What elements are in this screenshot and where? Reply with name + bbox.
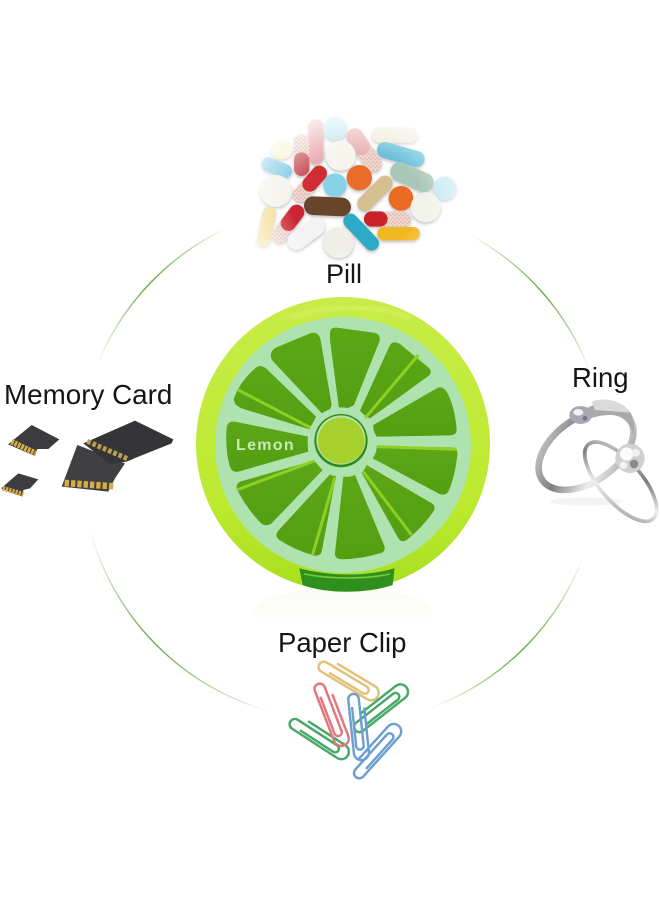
large ring (524, 393, 648, 506)
hub (308, 407, 374, 474)
small card top (8, 425, 59, 456)
compartments (226, 328, 457, 592)
image: paper clips (288, 656, 411, 780)
label: Paper Clip: Paper Clip (278, 627, 406, 658)
label: Pill: Pill (326, 259, 362, 289)
dividers inside compartments (237, 355, 457, 556)
diamonds (569, 406, 592, 424)
connecting arc: top left (98, 228, 227, 363)
large card front (62, 445, 125, 492)
small card bottom (1, 473, 38, 497)
connecting arc: top right (470, 235, 590, 372)
outer lime case (196, 297, 490, 591)
image: memory cards (1, 421, 173, 497)
large card back (83, 421, 173, 464)
label: Memory Card: Memory Card (4, 379, 172, 410)
case highlight (290, 308, 410, 318)
image: rings (524, 393, 660, 532)
label: Ring: Ring (572, 362, 629, 393)
pill box: lemon slice (196, 297, 490, 592)
label: Lemon: Lemon (236, 437, 295, 454)
center button (318, 418, 365, 464)
small ring (573, 431, 660, 532)
image: pills (237, 102, 477, 275)
connecting arc: bottom right (430, 557, 583, 708)
reflection below case (253, 588, 433, 636)
latch (299, 568, 395, 592)
connecting arc: bottom left (90, 530, 272, 712)
pale translucent lid (215, 317, 471, 573)
